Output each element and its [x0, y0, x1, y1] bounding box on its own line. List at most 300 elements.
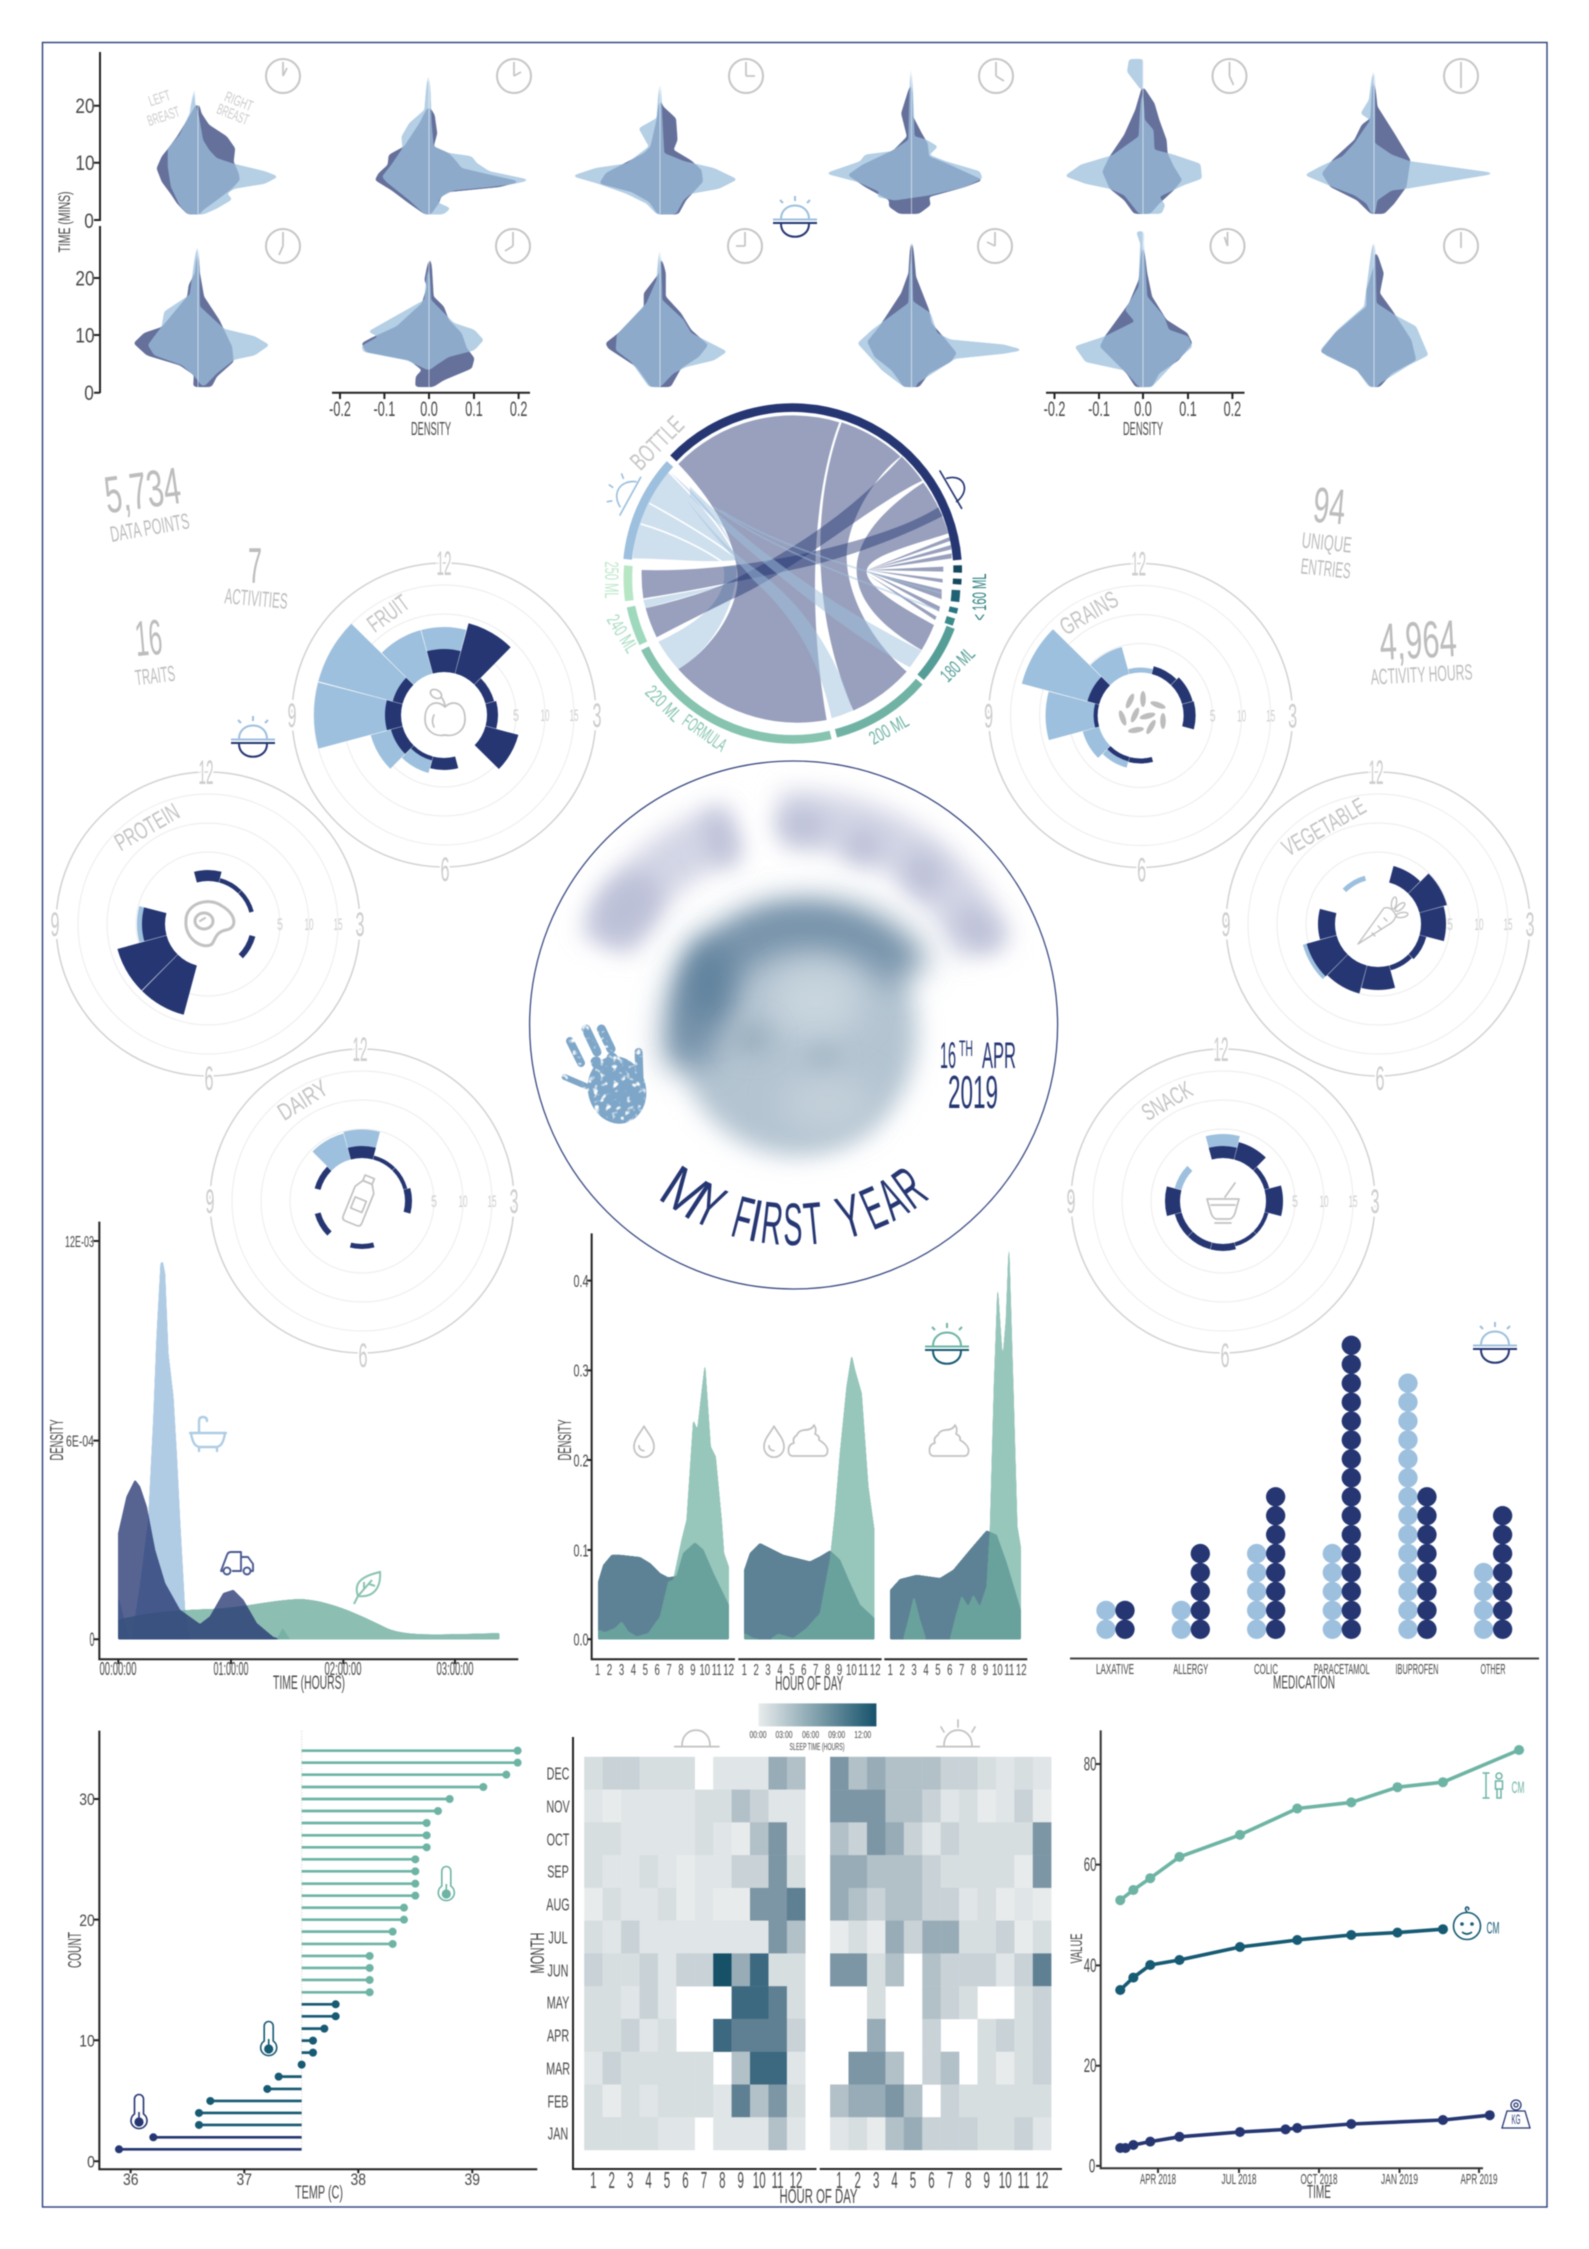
month labels: JUN: [548, 1962, 568, 1981]
month labels: JAN: [548, 2125, 568, 2144]
density axis left: 0.2: [510, 397, 527, 421]
polar chart: snack: 12: [1214, 1031, 1228, 1069]
label: vegetable: VEGETABLE: [1278, 793, 1371, 862]
stat: unique entries: ENTRIES: [1300, 553, 1352, 584]
panel: mixed nappies density: [744, 1355, 874, 1639]
hour ticks: dirty: 4: [923, 1660, 929, 1679]
nappy chart labels: 0.1: [573, 1542, 589, 1561]
polar chart: protein: 5: [277, 915, 283, 934]
hour ticks: night: 4: [645, 2168, 652, 2193]
polar chart: fruit: 15: [570, 706, 578, 725]
icon: sunrise sunset teal: [925, 1323, 969, 1364]
hour ticks: wet: 7: [666, 1660, 672, 1679]
title: my first year: [649, 1153, 938, 1259]
panel: dirty nappies density: [890, 1242, 1021, 1639]
hour ticks: wet: 11: [712, 1660, 722, 1679]
panel: nappy density by hour: [555, 1233, 1027, 1695]
lollipop labels: 10: [79, 2032, 95, 2051]
density axis right: [1044, 393, 1244, 439]
density axis right: 0.2: [1224, 397, 1241, 421]
polar chart: vegetable: 5: [1447, 915, 1453, 934]
violin y axes: 20: [75, 96, 95, 118]
hour ticks: mixed: [742, 1660, 881, 1679]
polar chart: vegetable: 15: [1504, 915, 1512, 934]
density axis right: -0.1: [1088, 397, 1110, 421]
lollipop labels: 37: [237, 2171, 252, 2189]
breast side labels: LEFT: [147, 87, 173, 110]
hour ticks: dirty: 12: [1016, 1660, 1027, 1679]
hour ticks: mixed: 1: [742, 1660, 747, 1679]
polar chart: grains: 10: [1237, 706, 1246, 726]
stat: unique entries: [1300, 477, 1353, 584]
hour ticks: night: 1: [590, 2168, 596, 2193]
stat: traits: TRAITS: [134, 661, 176, 690]
hour ticks: dirty: 8: [971, 1660, 976, 1679]
line chart axis labels: 40: [1084, 1956, 1097, 1977]
month labels: FEB: [548, 2093, 569, 2112]
density axis right: 0.0: [1134, 397, 1152, 421]
polar chart: snack: 6: [1220, 1337, 1230, 1375]
lollipop labels: 38: [351, 2171, 366, 2189]
medication axis: COLIC: [1254, 1661, 1278, 1678]
blurred name arch: [580, 805, 1008, 960]
lollipops: low temperature: [119, 2137, 302, 2149]
chord labels: BOTTLE: [625, 411, 690, 476]
polar chart: grains: 9: [984, 698, 993, 736]
icon: weight in kg: [1502, 2100, 1530, 2128]
polar chart: protein: 12: [198, 754, 214, 792]
breast side labels: [145, 87, 255, 130]
hour ticks: mixed: 11: [858, 1660, 868, 1679]
month labels: [546, 1765, 570, 2144]
polar chart: grains: 6: [1137, 852, 1146, 890]
handprint: [565, 1029, 654, 1130]
panel: activity duration density chart: [47, 1222, 518, 1694]
hour ticks: dirty: 3: [911, 1660, 917, 1679]
hour ticks: dirty: [888, 1660, 1027, 1679]
label: fruit: FRUIT: [362, 590, 415, 638]
polar chart: dairy: 9: [206, 1183, 214, 1221]
panel: growth line chart: [1067, 1730, 1530, 2202]
chord labels: 250 ML: [600, 562, 621, 598]
text: 3: [510, 1183, 518, 1221]
icon: leaf: [354, 1572, 380, 1604]
violin y axes: TIME (MINS): [55, 192, 74, 252]
hour ticks: night: 10: [753, 2168, 766, 2193]
icon: bottle: [342, 1173, 379, 1227]
medication axis: IBUPROFEN: [1396, 1661, 1438, 1678]
density chart labels: 12E-03: [65, 1234, 94, 1251]
hour ticks: dirty: 2: [900, 1660, 905, 1679]
icon: day half sun: [607, 474, 641, 515]
icon: bath: [190, 1417, 226, 1451]
panel: growth line chart: CM: [1486, 1918, 1500, 1938]
hour ticks: dirty: 5: [935, 1660, 941, 1679]
month labels: DEC: [547, 1765, 570, 1784]
hour ticks: day: 12: [1036, 2168, 1048, 2193]
hour ticks: wet: 10: [699, 1660, 710, 1679]
lollipop labels: [65, 1791, 480, 2202]
polar chart: fruit: 6: [440, 851, 450, 889]
hour ticks: wet: 4: [631, 1660, 636, 1679]
chord labels: 180 ML: [937, 644, 980, 687]
chord labels: 200 ML: [866, 711, 913, 750]
density area: tummy time: [118, 1599, 499, 1639]
icon: mortar and pestle: [1207, 1183, 1239, 1223]
hour ticks: day: 2: [855, 2168, 861, 2193]
hour ticks: night: 7: [701, 2168, 707, 2193]
polar chart: protein: 6: [204, 1060, 214, 1098]
title: my first year: M: [649, 1153, 721, 1232]
nappy chart labels: [555, 1272, 843, 1695]
polar chart: dairy: 5: [431, 1192, 437, 1211]
polar chart: dairy: 10: [458, 1192, 468, 1211]
violin y axes: 10: [75, 153, 95, 175]
panel: central portrait circle: APR: [982, 1035, 1016, 1076]
hour ticks: mixed: 6: [801, 1660, 806, 1679]
label: protein: PROTEIN: [110, 798, 184, 857]
stat: activities: [224, 538, 289, 614]
icon: thermometer low: [131, 2094, 147, 2129]
violin y axes: 10: [75, 325, 95, 348]
icon: sunrise sunset: [231, 716, 275, 757]
icon: drop: [634, 1426, 654, 1457]
lollipop labels: 30: [79, 1791, 95, 1809]
title: my first year: Y: [685, 1171, 734, 1242]
polar chart: snack: 9: [1066, 1183, 1076, 1221]
violin y axes: 20: [75, 268, 95, 291]
icon: thermometer normal: [261, 2022, 277, 2056]
line chart axis labels: 80: [1084, 1755, 1097, 1775]
density chart labels: DENSITY: [47, 1420, 67, 1460]
lollipops: normal temperature: [199, 2004, 336, 2125]
text: 3: [1370, 1183, 1380, 1221]
hour ticks: dirty: 10: [992, 1660, 1003, 1679]
line chart axis labels: JUL 2018: [1222, 2171, 1256, 2188]
icon: apple: [425, 688, 465, 735]
violin y axes: 0: [84, 383, 94, 405]
blurred portrait photo: [677, 908, 917, 1156]
title: my first year: Y: [829, 1182, 871, 1252]
lollipop labels: TEMP (C): [295, 2182, 343, 2202]
hour ticks: wet: 1: [595, 1660, 600, 1679]
date text: 16: [940, 1035, 956, 1076]
panel: bottle chord diagram: [600, 408, 991, 756]
chords: [633, 415, 952, 723]
lollipop labels: 20: [79, 1912, 95, 1930]
hour ticks: dirty: 7: [959, 1660, 964, 1679]
icon: height in cm: [1482, 1773, 1524, 1798]
month labels: MAR: [546, 2060, 570, 2079]
panel: breastfeeding violin charts: [55, 52, 1494, 439]
stat: activity hours: [1370, 610, 1473, 690]
icon: sunrise sunset: [773, 196, 817, 237]
density chart labels: 6E-04: [66, 1434, 94, 1450]
label: grains: GRAINS: [1055, 586, 1123, 641]
density axis left: [329, 393, 530, 439]
line chart axis labels: JAN 2019: [1381, 2171, 1418, 2188]
legend: sleep time: SLEEP TIME (HOURS): [790, 1742, 844, 1753]
density chart labels: 02:00:00: [324, 1659, 362, 1679]
hour ticks: night: 9: [738, 2168, 744, 2193]
chord labels: < 160 ML: [970, 574, 991, 620]
heatmap axis titles: MONTH: [528, 1932, 549, 1974]
legend: sleep time: 06:00: [802, 1730, 819, 1741]
polar chart: grains: 5: [1210, 706, 1216, 726]
date text: TH: [959, 1036, 973, 1061]
hour ticks: mixed: 10: [846, 1660, 857, 1679]
icon: poo: [929, 1425, 969, 1456]
density axis left: 0.1: [465, 397, 483, 421]
stat: unique entries: 94: [1311, 477, 1348, 535]
line chart axis labels: APR 2019: [1460, 2171, 1498, 2188]
text: 3: [1526, 906, 1534, 944]
polar chart: fruit: 10: [540, 706, 550, 725]
icon: drop and poo: [764, 1425, 828, 1457]
polar chart: snack: [1066, 1031, 1380, 1375]
hour ticks: day: 11: [1018, 2168, 1030, 2193]
icon: night half moon: [940, 471, 964, 508]
density chart labels: 00:00:00: [100, 1659, 136, 1679]
chord outer arcs: [628, 408, 958, 739]
violin y axes: 0: [84, 211, 94, 233]
hour ticks: night: [590, 2168, 802, 2193]
polar chart: vegetable: [1222, 754, 1534, 1098]
title: my first year: F: [726, 1182, 760, 1252]
polar chart: dairy: 12: [352, 1031, 368, 1069]
polar chart: vegetable: 10: [1474, 915, 1484, 934]
polar chart: protein: 9: [50, 906, 60, 944]
violins: right half of poster: [827, 59, 1494, 387]
hour ticks: mixed: 5: [789, 1660, 795, 1679]
icon: baby head in cm: [1454, 1907, 1500, 1940]
stat: activities: 7: [248, 538, 262, 594]
stat: traits: 16: [133, 609, 164, 667]
polar chart: fruit: 9: [288, 697, 296, 735]
chord labels: 240 ML: [602, 611, 641, 657]
line chart axis labels: OCT 2018: [1300, 2171, 1338, 2188]
text: 3: [1288, 698, 1297, 736]
hour ticks: mixed: 7: [813, 1660, 818, 1679]
title: my first year: R: [758, 1188, 786, 1257]
medication axis: [1070, 1658, 1539, 1692]
polar chart: protein: 10: [304, 915, 314, 934]
stat: activity hours: ACTIVITY HOURS: [1370, 659, 1473, 690]
icon: thermometer high: [438, 1866, 454, 1901]
hour ticks: day: 5: [910, 2168, 916, 2193]
hour ticks: mixed: 3: [765, 1660, 771, 1679]
hour ticks: wet: 9: [690, 1660, 696, 1679]
density area: car: [118, 1480, 282, 1639]
hour ticks: night: 5: [664, 2168, 670, 2193]
title: my first year: A: [867, 1165, 918, 1234]
hour ticks: day: 7: [947, 2168, 953, 2193]
line chart axis labels: 60: [1084, 1855, 1097, 1876]
density axis left: DENSITY: [411, 419, 451, 439]
series: head circumference: [1120, 1929, 1443, 1990]
line chart axis labels: APR 2018: [1140, 2171, 1176, 2188]
month labels: AUG: [546, 1896, 570, 1915]
medication axis: PARACETAMOL: [1314, 1661, 1370, 1678]
chord labels: 220 ML: [641, 682, 685, 726]
stat: activity hours: 4,964: [1378, 610, 1458, 672]
panel: medication dot chart: [1070, 1322, 1539, 1692]
dots: dark night doses: [1125, 1345, 1503, 1629]
breast side labels: BREAST: [145, 104, 182, 130]
line chart axis labels: 0: [1089, 2157, 1095, 2177]
hour ticks: night: 3: [627, 2168, 633, 2193]
hour ticks: day: 8: [965, 2168, 971, 2193]
line chart axis labels: VALUE: [1067, 1934, 1086, 1964]
polar chart: protein: [50, 754, 364, 1098]
polar chart: vegetable: 12: [1368, 754, 1384, 792]
hour ticks: wet: 12: [723, 1660, 734, 1679]
violins: left half of poster: [134, 59, 736, 387]
hour ticks: mixed: 12: [870, 1660, 881, 1679]
label: snack: SNACK: [1137, 1076, 1197, 1127]
polar chart: protein: 15: [334, 915, 342, 934]
hour ticks: night: 2: [609, 2168, 615, 2193]
hour ticks: night: 12: [790, 2168, 802, 2193]
stat: activities: ACTIVITIES: [224, 583, 289, 614]
legend: sleep time: 00:00: [750, 1730, 767, 1741]
panel: nappy density by hour: HOUR OF DAY: [775, 1673, 843, 1695]
heatmap: day cells: [830, 1757, 1051, 2150]
density axis left: -0.1: [374, 397, 395, 421]
icon: weight in kg: KG: [1512, 2111, 1520, 2127]
legend: sleep time: 03:00: [776, 1730, 793, 1741]
hour ticks: dirty: 9: [983, 1660, 988, 1679]
nappy chart labels: 0.0: [573, 1631, 589, 1650]
medication axis: LAXATIVE: [1096, 1661, 1134, 1678]
line chart axis labels: TIME: [1307, 2182, 1331, 2202]
hour ticks: night: 6: [682, 2168, 689, 2193]
nappy chart labels: 0.2: [573, 1452, 589, 1471]
medication axis: OTHER: [1480, 1661, 1506, 1678]
series: height: [1120, 1750, 1519, 1900]
hour ticks: wet: 6: [655, 1660, 660, 1679]
density axis right: 0.1: [1179, 397, 1197, 421]
stat: data points: [101, 457, 191, 547]
hour ticks: dirty: 6: [947, 1660, 952, 1679]
chord labels: [600, 411, 991, 756]
label: dairy: DAIRY: [273, 1075, 333, 1126]
polar chart: dairy: [206, 1031, 518, 1375]
text: 3: [592, 697, 602, 735]
density chart labels: TIME (HOURS): [273, 1673, 345, 1694]
hour ticks: night: 8: [719, 2168, 725, 2193]
title: my first year: E: [851, 1173, 896, 1242]
polar chart: grains: 12: [1131, 546, 1146, 584]
nappy chart labels: 0.4: [573, 1272, 589, 1292]
panel: wet nappies density: [598, 1363, 729, 1639]
polar chart: grains: [984, 546, 1297, 890]
density area: bath: [118, 1262, 190, 1639]
date text: [940, 1035, 1016, 1118]
hour ticks: wet: 5: [643, 1660, 648, 1679]
icon: truck: [221, 1552, 253, 1574]
panel: temperature lollipop chart: [65, 1731, 537, 2202]
heatmap: night cells: [584, 1757, 806, 2150]
title: my first year: T: [801, 1190, 826, 1259]
heatmap axis titles: HOUR OF DAY: [780, 2186, 858, 2208]
hour ticks: mixed: 2: [754, 1660, 759, 1679]
stat: traits: [133, 609, 176, 690]
hour ticks: day: 4: [891, 2168, 898, 2193]
series: weight: [1120, 2115, 1490, 2148]
density chart labels: 01:00:00: [214, 1659, 248, 1679]
icon: day sun: [937, 1720, 979, 1747]
month labels: OCT: [547, 1831, 569, 1850]
dots: light day doses: [1106, 1382, 1484, 1629]
polar chart: vegetable: 9: [1222, 906, 1230, 944]
icon: night sun: [675, 1730, 719, 1747]
text: 3: [356, 906, 364, 944]
nappy chart labels: 0.3: [573, 1362, 589, 1381]
hour ticks: mixed: 9: [837, 1660, 842, 1679]
hour ticks: day: 9: [984, 2168, 990, 2193]
stat: data points: DATA POINTS: [108, 508, 191, 547]
hour ticks: wet: [595, 1660, 734, 1679]
month labels: JUL: [548, 1929, 568, 1948]
lollipop labels: 36: [123, 2171, 138, 2189]
lollipop labels: 39: [465, 2171, 480, 2189]
hour ticks: dirty: 1: [888, 1660, 893, 1679]
line chart axis labels: [1067, 1755, 1498, 2202]
hour ticks: day: 3: [873, 2168, 879, 2193]
icon: carrot: [1358, 897, 1408, 944]
legend: sleep time: 09:00: [828, 1730, 845, 1741]
polar chart: fruit: 12: [436, 545, 452, 583]
lollipops: high temperature: [302, 1751, 518, 1992]
panel: central portrait circle: [530, 761, 1058, 1289]
panel: growth line chart: CM: [1512, 1778, 1524, 1797]
month labels: NOV: [546, 1798, 570, 1817]
medication axis: MEDICATION: [1273, 1672, 1335, 1692]
legend: sleep time: [750, 1703, 876, 1753]
month labels: SEP: [547, 1863, 569, 1882]
breast side labels: RIGHT: [222, 89, 255, 115]
density axis left: 0.0: [420, 397, 438, 421]
icon: sunrise sunset: [1473, 1322, 1517, 1363]
hour ticks: day: 10: [999, 2168, 1012, 2193]
title: my first year: I: [744, 1186, 768, 1255]
hour ticks: dirty: 11: [1004, 1660, 1014, 1679]
hour ticks: wet: 3: [619, 1660, 624, 1679]
density axis right: DENSITY: [1123, 419, 1163, 439]
title: my first year: S: [783, 1190, 803, 1258]
hour ticks: day: 1: [836, 2168, 842, 2193]
icon: rice grains: [1117, 691, 1166, 735]
hour ticks: day: 6: [928, 2168, 935, 2193]
clock icons: [266, 59, 1478, 263]
density axis left: -0.2: [329, 397, 351, 421]
polar chart: fruit: 5: [513, 706, 519, 725]
heatmap axes: [573, 1737, 1062, 2169]
line chart axis labels: 20: [1084, 2056, 1097, 2077]
panel: sleep heatmap: [528, 1703, 1062, 2208]
hour ticks: mixed: 4: [777, 1660, 783, 1679]
lollipop labels: 0: [87, 2153, 95, 2172]
polar chart: snack: 15: [1348, 1192, 1358, 1211]
stat: data points: 5,734: [101, 457, 184, 525]
density chart labels: [47, 1234, 474, 1694]
heatmap axis titles: [528, 1932, 858, 2208]
polar chart: dairy: 15: [488, 1192, 496, 1211]
stat: unique entries: UNIQUE: [1301, 527, 1353, 558]
month labels: MAY: [547, 1994, 569, 2013]
medication axis: ALLERGY: [1173, 1661, 1208, 1678]
